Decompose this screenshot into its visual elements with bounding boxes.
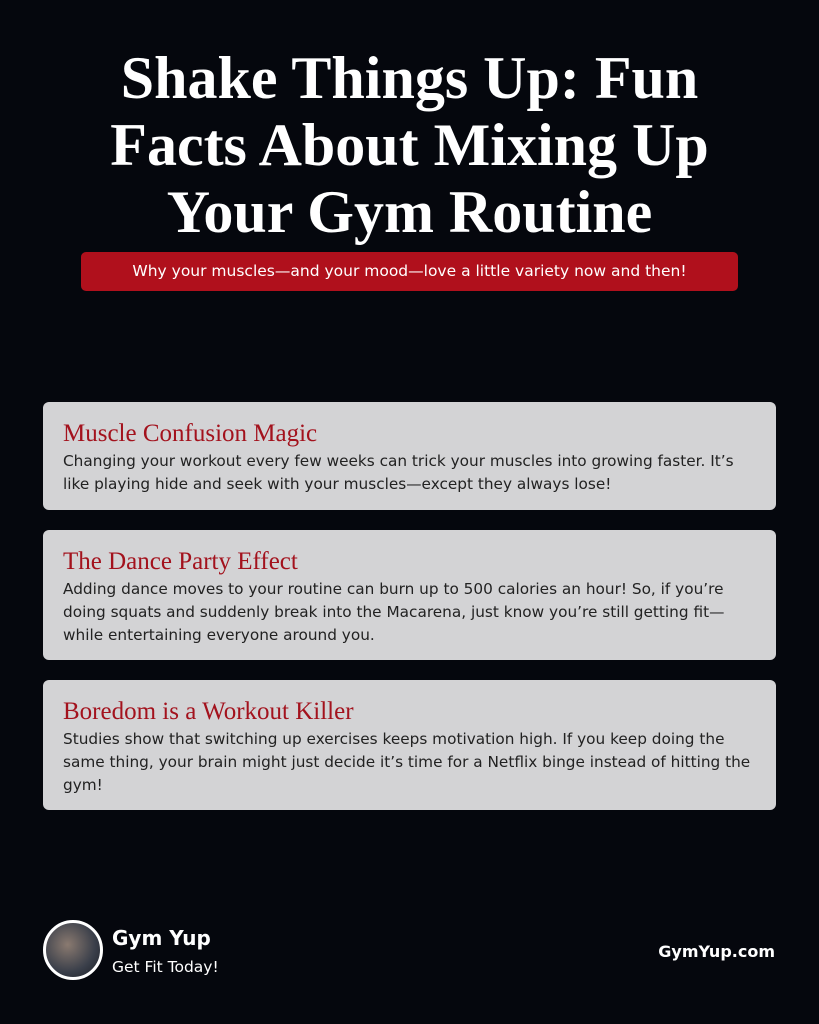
text: Adding dance moves to your routine can burn up to 500 calories an hour! So, if you’re doing squats and suddenly break into the Macarena, just know you’re still getting fit—while entertaining everyone around you. (63, 580, 724, 644)
tagline: Get Fit Today! (112, 958, 219, 976)
title: Your Gym Routine (167, 179, 652, 245)
title: Shake Things Up: Fun (121, 45, 698, 111)
text: Studies show that switching up exercises keeps motivation high. If you keep doing the same thing, your brain might just decide it’s time for a Netflix binge instead of hitting the gym! (63, 730, 750, 794)
heading: Boredom is a Workout Killer (63, 698, 354, 725)
icon: avatar (43, 920, 103, 980)
website: GymYup.com (658, 942, 775, 961)
panel: dance party (43, 530, 776, 660)
title: Facts About Mixing Up (110, 112, 709, 178)
heading: The Dance Party Effect (63, 548, 298, 575)
subtitle banner: Why your muscles—and your mood—love a little variety now and then! (132, 262, 687, 280)
heading: Muscle Confusion Magic (63, 420, 317, 447)
subtitle banner (81, 252, 738, 291)
text: Changing your workout every few weeks can trick your muscles into growing faster. It’s like playing hide and seek with your muscles—except they always lose! (63, 452, 734, 493)
panel: boredom (43, 680, 776, 810)
panel: muscle confusion (43, 402, 776, 510)
brand name: Gym Yup (112, 926, 211, 950)
title (110, 45, 709, 245)
